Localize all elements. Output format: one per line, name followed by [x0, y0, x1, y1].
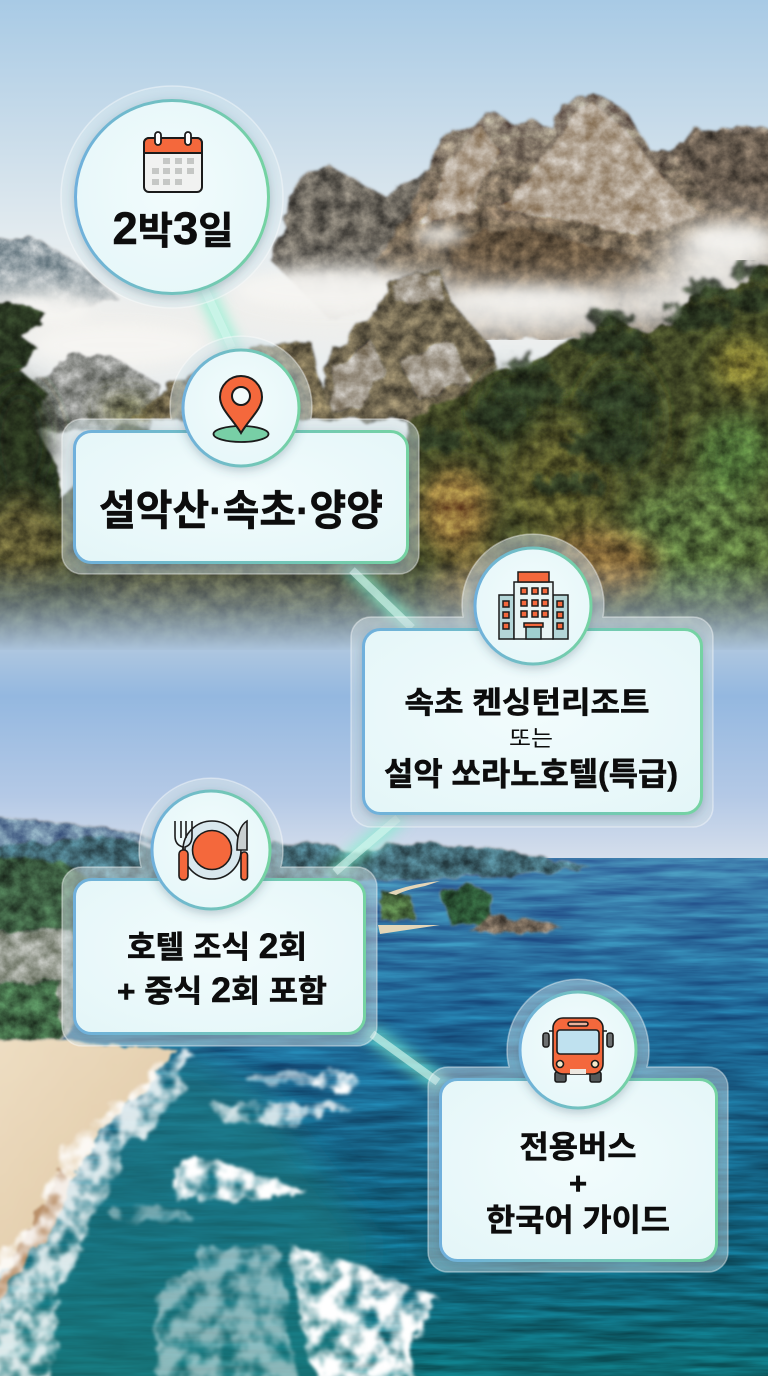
beach — [0, 1040, 178, 1350]
icon: hotel building — [499, 572, 568, 639]
label: bus and guide: 한국어 가이드 — [486, 1203, 670, 1238]
label: 2박3일: 2박3일 — [112, 203, 234, 254]
node: destination — [62, 336, 419, 574]
node: hotel — [351, 534, 713, 827]
label: bus and guide: + — [569, 1166, 587, 1201]
node: duration — [61, 86, 283, 308]
label: destinations: 설악산·속초·양양 — [99, 487, 383, 534]
foam — [0, 1050, 440, 1376]
label: meals — [117, 927, 327, 1010]
node: meals — [62, 778, 377, 1046]
icon: calendar — [144, 132, 202, 192]
forest — [380, 260, 768, 680]
node: transport — [428, 979, 728, 1272]
label: hotel names: 속초 켄싱턴리조트 — [404, 687, 650, 720]
background: coast and sea — [0, 560, 768, 1376]
icon: plate and cutlery — [175, 821, 248, 880]
label: hotel names: 또는 — [509, 726, 553, 751]
label: meals: + 중식 2회 포함 — [117, 971, 327, 1010]
fog — [0, 224, 768, 375]
label: meals: 호텔 조식 2회 — [127, 927, 307, 966]
background: mountain scene — [0, 0, 768, 680]
connector lines — [205, 290, 438, 1082]
icon: bus — [543, 1018, 613, 1082]
shallow water — [0, 1050, 370, 1376]
icon: map pin — [214, 376, 268, 442]
label: bus and guide: 전용버스 — [520, 1130, 636, 1165]
label: hotel names — [384, 687, 678, 792]
label: hotel names: 설악 쏘라노호텔(특급) — [384, 756, 678, 792]
label: bus and guide — [486, 1130, 670, 1238]
pine canopies — [412, 262, 768, 497]
